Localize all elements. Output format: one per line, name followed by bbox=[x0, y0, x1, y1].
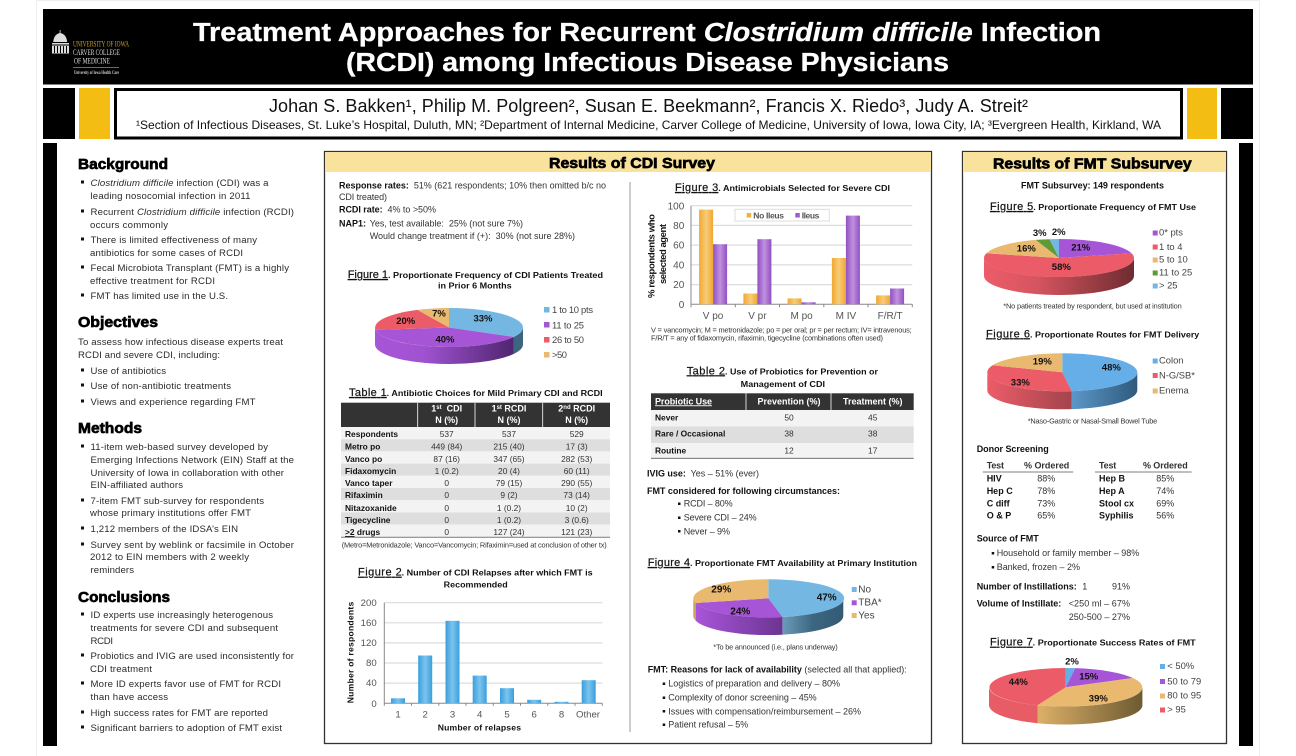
table 1: nd bbox=[563, 405, 571, 411]
panel: results of FMT subsurvey bbox=[962, 152, 1226, 744]
figure 1 heading bbox=[348, 269, 603, 291]
donor screening table: HIV bbox=[987, 474, 1002, 484]
table 1: 449 (84) bbox=[431, 442, 463, 452]
text block: response rates: NAP1: bbox=[339, 219, 366, 229]
table 2: Prevention (%) bbox=[757, 396, 821, 406]
text block: instillations and volume: 91% bbox=[1112, 582, 1130, 592]
authors: Johan S. Bakken¹, Philip M. Polgreen², Susan E. Beekmann², Francis X. Riedo³, Judy A. Streit² bbox=[269, 96, 1028, 116]
figure 3: grouped bar chart: 80 bbox=[673, 221, 685, 232]
figure 3: grouped bar chart: selected agent bbox=[658, 223, 669, 284]
figure 7: pie chart: 2% bbox=[1065, 656, 1079, 667]
donor screening table: Hep A bbox=[1099, 486, 1125, 496]
text block: background bullets: effective treatment for RCDI bbox=[90, 276, 215, 287]
text block: conclusions bullets: More ID experts favor use of FMT for RCDI bbox=[90, 679, 281, 690]
authors box bbox=[116, 90, 1182, 138]
table 1: CDI bbox=[442, 404, 462, 414]
figure 2: bar chart: Number of respondents bbox=[346, 601, 356, 703]
text block: methods bullets: EIN-affiliated authors bbox=[90, 480, 183, 491]
right side strip bbox=[1239, 143, 1253, 746]
donor screening table: 78% bbox=[1037, 486, 1055, 496]
figure 5: pie chart: 3% bbox=[1033, 228, 1047, 239]
panel: results of CDI survey bbox=[324, 152, 932, 744]
text block: methods bullets bbox=[81, 442, 295, 576]
figure 3 legend: No Ileus bbox=[753, 210, 784, 220]
figure 5 legend: > 25 bbox=[1159, 280, 1178, 291]
figure 6 legend: Colon bbox=[1159, 355, 1184, 366]
text block: response rates: Would change treatment if (+): 30% (not sure 28%) bbox=[370, 231, 575, 241]
table 2: Probiotic Use bbox=[655, 396, 712, 406]
text block: reasons for lack of availability: FMT: Reasons for lack of availability (selected all that applied): bbox=[648, 664, 907, 674]
table 1 heading: Table 1 bbox=[349, 387, 387, 399]
table 1 note: (Metro=Metronidazole; Vanco=Vancomycin; Rifaximin=used at conclusion of other tx) bbox=[342, 541, 607, 550]
figure 2: bar chart: 0 bbox=[371, 699, 377, 710]
donor screening table: Hep B bbox=[1099, 474, 1126, 484]
text block: methods bullets: Emerging Infections Network (EIN) Staff at the bbox=[90, 455, 294, 466]
text block: conclusions bullets: than have access bbox=[90, 692, 168, 703]
figure 1 legend: 1 to 10 pts bbox=[552, 304, 593, 315]
table 1: 127 (24) bbox=[493, 527, 525, 537]
text block: reasons for lack of availability bbox=[648, 664, 907, 730]
table 1: 10 (2) bbox=[566, 503, 588, 513]
heading: Objectives: Objectives bbox=[78, 315, 158, 331]
figure 4 heading: Figure 4 bbox=[648, 557, 690, 569]
text block: methods bullets: 2012 to EIN members with 2 weekly bbox=[90, 552, 249, 563]
table 2: 12 bbox=[784, 445, 794, 455]
table 2 bbox=[651, 393, 914, 459]
text block: conclusions bullets: ID experts use increasingly heterogenous bbox=[90, 610, 273, 621]
table 1: RCDI bbox=[571, 404, 595, 414]
figure 7 legend: < 50% bbox=[1167, 660, 1194, 671]
text block: instillations and volume: Volume of Instillate: bbox=[977, 599, 1061, 609]
table 1: Vanco taper bbox=[345, 478, 393, 488]
figure 2 heading: Recommended bbox=[444, 580, 508, 590]
figure 3: grouped bar chart: M po bbox=[790, 311, 813, 322]
figure 3 legend: Ileus bbox=[802, 210, 820, 220]
donor screening table: 69% bbox=[1156, 499, 1174, 509]
donor screening table: 56% bbox=[1156, 511, 1174, 521]
figure 7: pie chart bbox=[989, 656, 1142, 725]
donor screening table: 88% bbox=[1037, 474, 1055, 484]
figure 4 heading: . Proportionate FMT Availability at Primary Institution bbox=[690, 558, 917, 568]
donor screening table: Test bbox=[987, 461, 1004, 471]
panel heading band: Results of FMT Subsurvey bbox=[993, 156, 1192, 172]
panel: background, objectives, methods, conclusions bbox=[78, 157, 295, 734]
figure 3 legend bbox=[735, 209, 829, 221]
table 1: 60 (11) bbox=[564, 466, 590, 476]
text block: reasons for lack of availability: Patient refusal – 5% bbox=[668, 720, 748, 730]
figure 3: grouped bar chart: 100 bbox=[668, 201, 685, 212]
table 2: Treatment (%) bbox=[843, 396, 902, 406]
affiliations: ¹Section of Infectious Diseases, St. Luke’s Hospital, Duluth, MN; ²Department of Internal Medicine, Carver College of Medicine, University of Iowa, Iowa City, IA; ³Evergreen Health, Kirkland, WA bbox=[136, 118, 1161, 132]
table 1: Respondents bbox=[345, 429, 398, 439]
table 1: 290 (55) bbox=[561, 478, 593, 488]
text block: objectives bbox=[78, 337, 283, 408]
figure 2: bar chart: Other bbox=[576, 709, 601, 720]
donor screening table: Syphilis bbox=[1099, 511, 1134, 521]
figure 3: grouped bar chart: V pr bbox=[748, 311, 767, 322]
logo: University of Iowa Carver College of Medicine: University of Iowa Health Care bbox=[74, 71, 120, 76]
figure 7: pie chart: 15% bbox=[1079, 672, 1099, 683]
text block: FMT considered: Never – 9% bbox=[684, 526, 730, 536]
text block: instillations and volume: Number of Instillations: bbox=[977, 582, 1077, 592]
table 1: 2 bbox=[558, 404, 563, 414]
figure 5: pie chart: 2% bbox=[1052, 227, 1066, 238]
figure 5 heading: Figure 5 bbox=[990, 201, 1033, 213]
table 1: 1 (0.2) bbox=[497, 515, 521, 525]
text block: background bullets: antibiotics for some cases of RCDI bbox=[90, 248, 243, 259]
title banner bbox=[43, 9, 1253, 84]
figure 6: pie chart bbox=[987, 353, 1137, 409]
text block: conclusions bullets: CDI treatment bbox=[90, 664, 152, 675]
figure 6: pie chart: 33% bbox=[1011, 378, 1030, 389]
figure 3 heading: . Antimicrobials Selected for Severe CDI bbox=[718, 183, 890, 193]
figure 6 legend: Enema bbox=[1159, 385, 1189, 396]
text block: FMT considered bbox=[647, 486, 840, 536]
figure 5 legend: 11 to 25 bbox=[1159, 267, 1192, 278]
figure 1 legend: >50 bbox=[552, 349, 567, 360]
text block: objectives: Use of non-antibiotic treatments bbox=[90, 381, 231, 392]
figure 2: bar chart: Number of relapses bbox=[438, 723, 521, 733]
donor screening table bbox=[983, 461, 1192, 521]
table 1: Fidaxomycin bbox=[345, 466, 396, 476]
text block: response rates: RCDI rate: 4% to >50% bbox=[339, 205, 436, 215]
figure 2 heading bbox=[358, 567, 593, 590]
figure 3: grouped bar chart: 60 bbox=[673, 241, 685, 252]
figure 1: pie chart: 20% bbox=[396, 316, 416, 327]
table 2: 17 bbox=[868, 445, 878, 455]
panel heading band bbox=[325, 152, 931, 172]
text block: source of FMT bbox=[977, 534, 1139, 572]
figure 3: grouped bar chart: 0 bbox=[679, 300, 685, 311]
table 1: 0 bbox=[444, 515, 449, 525]
figure 4: pie chart: 29% bbox=[711, 585, 731, 596]
left colour blocks bbox=[43, 88, 110, 139]
text block: methods bullets: 1,212 members of the IDSA’s EIN bbox=[90, 524, 238, 535]
figure 7: pie chart: 39% bbox=[1089, 694, 1108, 705]
heading: Conclusions: Conclusions bbox=[78, 590, 170, 606]
figure 2: bar chart: 80 bbox=[366, 658, 377, 669]
figure 1: pie chart bbox=[375, 308, 523, 364]
table 1: 9 (2) bbox=[500, 490, 518, 500]
table 2: Rare / Occasional bbox=[655, 429, 725, 439]
figure 2: bar chart: 120 bbox=[361, 638, 377, 649]
figure 2: bar chart bbox=[346, 598, 602, 733]
text block: methods bullets: Survey sent by weblink or facsimile in October bbox=[90, 540, 295, 551]
table 2: 45 bbox=[868, 412, 878, 422]
table 1: 347 (65) bbox=[493, 454, 525, 464]
table 1: 1 (0.2) bbox=[435, 466, 459, 476]
figure 7 heading bbox=[990, 637, 1196, 649]
figure 6 legend: N-G/SB* bbox=[1159, 369, 1195, 380]
figure 3 heading: Figure 3 bbox=[675, 182, 718, 194]
donor screening table: O & P bbox=[987, 511, 1011, 521]
logo: University of Iowa Carver College of Medicine: OF MEDICINE bbox=[74, 56, 110, 66]
figure 1: pie chart: 7% bbox=[432, 309, 446, 320]
table 1: 537 bbox=[502, 429, 516, 439]
figure 3 heading bbox=[675, 182, 890, 194]
table 2: Routine bbox=[655, 445, 687, 455]
table 2 heading: Management of CDI bbox=[741, 379, 825, 389]
figure 6 legend bbox=[1153, 355, 1195, 396]
figure 5 legend: 0* pts bbox=[1159, 227, 1183, 238]
figure 3 note: V = vancomycin; M = metronidazole; po = per oral; pr = per rectum; IV= intravenous; bbox=[651, 325, 912, 334]
table 1: 529 bbox=[570, 429, 584, 439]
text block: reasons for lack of availability: Complexity of donor screening – 45% bbox=[668, 693, 817, 703]
text block: source of FMT: Banked, frozen – 2% bbox=[997, 562, 1080, 572]
figure 3: grouped bar chart: F/R/T bbox=[878, 311, 903, 322]
text block: instillations and volume: <250 ml – 67% bbox=[1069, 599, 1130, 609]
figure 3: grouped bar chart bbox=[646, 201, 912, 322]
table 1: 1 bbox=[431, 404, 436, 414]
text block: instillations and volume: 250-500 – 27% bbox=[1069, 612, 1130, 622]
donor screening table: % Ordered bbox=[1024, 461, 1069, 471]
table 1: Metro po bbox=[345, 442, 380, 452]
text block: IVIG use: IVIG use: Yes – 51% (ever) bbox=[647, 469, 759, 479]
figure 6 note: *Naso-Gastric or Nasal-Small Bowel Tube bbox=[1028, 416, 1157, 425]
table 2: 38 bbox=[868, 429, 878, 439]
subsurvey count: FMT Subsurvey: 149 respondents bbox=[1021, 180, 1164, 190]
table 1: 87 (16) bbox=[433, 454, 460, 464]
figure 1 heading: Figure 1 bbox=[348, 269, 388, 281]
figure 2: bar chart: 160 bbox=[361, 618, 377, 629]
donor screening table: Test bbox=[1099, 461, 1116, 471]
table 1: st bbox=[497, 405, 502, 411]
table 1: Tigecycline bbox=[345, 515, 391, 525]
donor screening table: 74% bbox=[1156, 486, 1174, 496]
table 1: 0 bbox=[444, 527, 449, 537]
figure 3 note bbox=[651, 325, 912, 343]
text block: objectives: Use of antibiotics bbox=[90, 366, 166, 377]
table 1: 537 bbox=[440, 429, 454, 439]
text block: response rates: CDI treated) bbox=[339, 192, 387, 202]
table 1: 3 (0.6) bbox=[565, 515, 589, 525]
figure 5 legend bbox=[1153, 227, 1192, 291]
figure 6: pie chart: 19% bbox=[1033, 356, 1052, 367]
donor screening table: Stool cx bbox=[1099, 499, 1134, 509]
text block: methods bullets: 7-item FMT sub-survey for respondents bbox=[90, 496, 264, 507]
figure 4 legend: Yes bbox=[858, 610, 875, 621]
table 2 heading bbox=[687, 365, 879, 389]
figure 7 legend: > 95 bbox=[1167, 704, 1186, 715]
text block: objectives: To assess how infectious disease experts treat bbox=[78, 337, 283, 348]
figure 5 legend: 1 to 4 bbox=[1159, 241, 1182, 252]
text block: methods bullets: reminders bbox=[90, 565, 134, 576]
donor screening table: 73% bbox=[1037, 499, 1055, 509]
table 2: 50 bbox=[784, 412, 794, 422]
figure 5 note: *No patients treated by respondent, but used at institution bbox=[1003, 302, 1182, 311]
figure 7: pie chart: 44% bbox=[1009, 677, 1028, 688]
text block: conclusions bullets: Probiotics and IVIG are used inconsistently for bbox=[90, 651, 295, 662]
figure 2: bar chart: 40 bbox=[366, 678, 377, 689]
figure 1 heading: . Proportionate Frequency of CDI Patients Treated bbox=[388, 270, 603, 280]
figure 4 heading bbox=[648, 557, 917, 569]
table 2: 38 bbox=[784, 429, 794, 439]
figure 5 heading bbox=[990, 201, 1196, 213]
text block: response rates bbox=[339, 181, 606, 241]
figure 6: pie chart: 48% bbox=[1102, 363, 1121, 374]
table 1: Nitazoxanide bbox=[345, 503, 397, 513]
table 1 heading bbox=[349, 387, 603, 399]
text block: background bullets: Recurrent Clostridium difficile infection (RCDI) bbox=[90, 207, 294, 218]
panel heading band bbox=[963, 152, 1226, 172]
table 1: RCDI bbox=[502, 404, 526, 414]
figure 7 legend bbox=[1160, 660, 1201, 715]
figure 2: bar chart: 200 bbox=[361, 598, 377, 609]
donor screening table: Hep C bbox=[987, 486, 1013, 496]
table 1: 0 bbox=[444, 503, 449, 513]
text block: conclusions bullets: treatments for severe CDI and subsequent bbox=[90, 623, 278, 634]
figure 5: pie chart: 16% bbox=[1017, 244, 1036, 255]
figure 4 note: *To be announced (i.e., plans underway) bbox=[713, 643, 838, 652]
text block: reasons for lack of availability: Logistics of preparation and delivery – 80% bbox=[668, 679, 840, 689]
text block: conclusions bullets bbox=[81, 610, 295, 734]
figure 5 heading: . Proportionate Frequency of FMT Use bbox=[1033, 202, 1196, 212]
table 1: 1 (0.2) bbox=[497, 503, 521, 513]
text block: instillations and volume bbox=[977, 582, 1130, 622]
logo: University of Iowa Carver College of Medicine: CARVER COLLEGE bbox=[73, 48, 120, 57]
figure 2: bar chart: 2 bbox=[423, 709, 428, 720]
figure 1 legend: 11 to 25 bbox=[552, 320, 584, 330]
figure 1 heading: in Prior 6 Months bbox=[438, 281, 512, 291]
text block: instillations and volume: 1 bbox=[1082, 582, 1087, 592]
figure 3: grouped bar chart: 20 bbox=[673, 280, 685, 291]
title line 1: Treatment Approaches for Recurrent Clostridium difficile Infection bbox=[193, 19, 1101, 47]
table 1 heading: . Antibiotic Choices for Mild Primary CDI and RCDI bbox=[387, 388, 603, 398]
text block: conclusions bullets: RCDI bbox=[90, 636, 113, 647]
figure 7 heading: Figure 7 bbox=[990, 637, 1033, 649]
table 1: >2 drugs bbox=[345, 527, 380, 537]
text block: background bullets: occurs commonly bbox=[90, 220, 168, 231]
figure 3: grouped bar chart: V po bbox=[703, 311, 724, 322]
table 1: N (%) bbox=[565, 415, 588, 425]
figure 4: pie chart: 47% bbox=[817, 593, 837, 604]
table 1 bbox=[341, 403, 610, 538]
figure 3: grouped bar chart: % respondents who bbox=[646, 214, 658, 298]
donor screening table: 65% bbox=[1037, 511, 1055, 521]
figure 1 legend bbox=[544, 304, 593, 360]
heading: Methods: Methods bbox=[78, 421, 142, 437]
figure 2: bar chart: 8 bbox=[559, 709, 564, 720]
text block: background bullets: Fecal Microbiota Transplant (FMT) is a highly bbox=[90, 263, 289, 274]
text block: methods bullets: University of Iowa in collaboration with other bbox=[90, 468, 285, 479]
text block: reasons for lack of availability: Issues with compensation/reimbursement – 26% bbox=[668, 706, 861, 716]
table 1: 0 bbox=[444, 478, 449, 488]
figure 1 legend: 26 to 50 bbox=[552, 334, 584, 345]
text block: background bullets: leading nosocomial infection in 2011 bbox=[90, 191, 250, 202]
text block: FMT considered: RCDI – 80% bbox=[684, 499, 733, 509]
figure 1: pie chart: 40% bbox=[435, 335, 455, 346]
donor screening heading: Donor Screening bbox=[977, 444, 1049, 454]
table 1: N (%) bbox=[498, 415, 520, 425]
text block: methods bullets: whose primary institutions offer FMT bbox=[89, 508, 251, 519]
donor screening table: % Ordered bbox=[1143, 461, 1188, 471]
figure 4: pie chart: 24% bbox=[730, 606, 750, 617]
text block: background bullets: There is limited effectiveness of many bbox=[90, 235, 257, 246]
figure 4 legend bbox=[852, 584, 882, 621]
figure 2: bar chart: 1 bbox=[395, 709, 401, 720]
figure 6 heading: Figure 6 bbox=[986, 328, 1030, 340]
right colour blocks bbox=[1187, 88, 1253, 139]
figure 5: pie chart: 21% bbox=[1071, 243, 1091, 254]
text block: source of FMT: Source of FMT bbox=[977, 534, 1039, 544]
logo: University of Iowa Carver College of Medicine bbox=[52, 25, 129, 76]
figure 6 heading: . Proportionate Routes for FMT Delivery bbox=[1030, 329, 1200, 339]
text block: response rates: Yes, test available: 25% (not sure 7%) bbox=[370, 219, 523, 229]
figure 4: pie chart bbox=[693, 579, 844, 635]
figure 5: pie chart bbox=[984, 227, 1134, 295]
figure 7 legend: 50 to 79 bbox=[1167, 675, 1201, 686]
table 1: 1 bbox=[492, 404, 497, 414]
text block: source of FMT: Household or family member – 98% bbox=[997, 548, 1139, 558]
figure 7 heading: . Proportionate Success Rates of FMT bbox=[1033, 638, 1196, 648]
figure 3 note: F/R/T = any of fidaxomycin, rifaximin, tigecycline (combinations often used) bbox=[651, 334, 883, 343]
donor screening table: C diff bbox=[987, 499, 1011, 509]
text block: FMT considered: FMT considered for following circumstances: bbox=[647, 486, 840, 496]
text block: background bullets: FMT has limited use in the U.S. bbox=[90, 291, 228, 302]
donor screening table: 85% bbox=[1156, 474, 1174, 484]
table 1: 282 (53) bbox=[561, 454, 593, 464]
text block: objectives: Views and experience regarding FMT bbox=[90, 397, 256, 408]
figure 3: grouped bar chart: 40 bbox=[673, 260, 685, 272]
figure 6 heading bbox=[986, 328, 1200, 340]
table 1: 20 (4) bbox=[498, 466, 520, 476]
figure 2: bar chart: 6 bbox=[532, 709, 537, 720]
figure 2 heading: . Number of CDI Relapses after which FMT is bbox=[402, 568, 593, 578]
table 1: st bbox=[436, 405, 442, 411]
text block: background bullets bbox=[81, 178, 294, 302]
table 1: 215 (40) bbox=[493, 442, 525, 452]
title line 2: (RCDI) among Infectious Disease Physicians bbox=[346, 49, 949, 77]
table 1: 79 (15) bbox=[496, 478, 522, 488]
left side strip bbox=[43, 143, 57, 746]
table 1: Vanco po bbox=[345, 454, 382, 464]
table 1: N (%) bbox=[435, 415, 458, 425]
figure 1: pie chart: 33% bbox=[473, 314, 493, 324]
figure 3: grouped bar chart: M IV bbox=[836, 311, 857, 322]
figure 2: bar chart: 3 bbox=[450, 709, 455, 720]
text block: methods bullets: 11-item web-based survey developed by bbox=[90, 442, 268, 453]
figure 2: bar chart: 4 bbox=[477, 709, 483, 720]
table 1: Rifaximin bbox=[345, 490, 383, 500]
text block: response rates: Response rates: 51% (621 respondents; 10% then omitted b/c no bbox=[339, 181, 606, 191]
table 1: 0 bbox=[444, 490, 449, 500]
text block: conclusions bullets: High success rates for FMT are reported bbox=[90, 708, 268, 719]
table 2: Never bbox=[655, 412, 679, 422]
figure 7 legend: 80 to 95 bbox=[1167, 690, 1201, 701]
panel heading band: Results of CDI Survey bbox=[549, 156, 715, 172]
table 2 heading: . Use of Probiotics for Prevention or bbox=[725, 366, 879, 376]
table 2 heading: Table 2 bbox=[687, 365, 725, 377]
table 1: 17 (3) bbox=[566, 442, 588, 452]
heading: Background: Background bbox=[78, 157, 168, 173]
table 1: 73 (14) bbox=[563, 490, 590, 500]
figure 4 legend: No bbox=[858, 584, 872, 595]
text block: background bullets: Clostridium difficile infection (CDI) was a bbox=[90, 178, 269, 189]
figure 5 legend: 5 to 10 bbox=[1159, 254, 1188, 265]
logo: University of Iowa Carver College of Medicine: UNIVERSITY OF IOWA bbox=[73, 40, 129, 48]
figure 4 legend: TBA* bbox=[858, 598, 882, 609]
table 1: 121 (23) bbox=[561, 527, 593, 537]
text block: FMT considered: Severe CDI – 24% bbox=[684, 513, 757, 523]
text block: conclusions bullets: Significant barriers to adoption of FMT exist bbox=[90, 723, 282, 734]
figure 2 heading: Figure 2 bbox=[358, 567, 402, 579]
figure 2: bar chart: 5 bbox=[504, 709, 510, 720]
text block: objectives: RCDI and severe CDI, including: bbox=[78, 350, 220, 361]
figure 5: pie chart: 58% bbox=[1052, 262, 1071, 273]
